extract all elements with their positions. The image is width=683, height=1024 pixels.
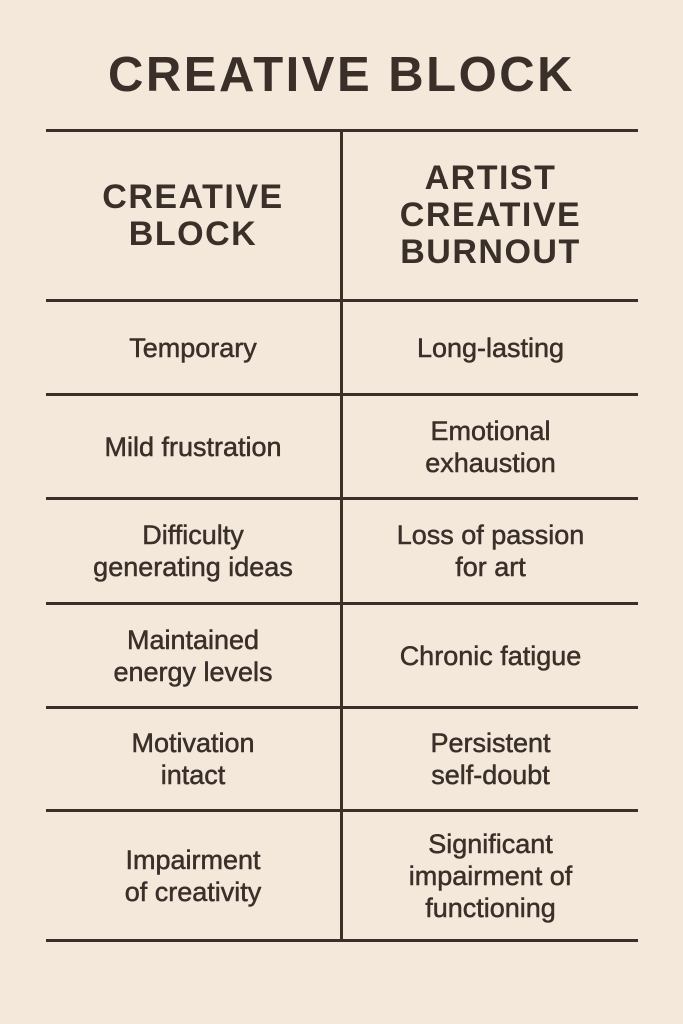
row 5 left: intact [161,760,225,790]
row 3 right: Loss of passion [397,520,584,550]
header: artist creative burnout: CREATIVE [400,196,581,234]
row 5 right [430,728,551,790]
row 6 right: functioning [425,892,556,922]
row 5 right: Persistent [430,728,551,758]
header: artist creative burnout: BURNOUT [400,233,581,271]
row 2 right: Emotional [430,416,551,446]
row 4 left [113,624,273,687]
row 3 left: generating ideas [93,552,293,582]
row 6 left: of creativity [125,876,261,906]
row 6 right [409,828,573,923]
row 5 right: self-doubt [431,760,550,790]
row 2 left: Mild frustration [104,432,282,462]
row 2 right: exhaustion [425,448,556,478]
row 5 left [131,728,255,790]
row 6 right: impairment of [409,860,572,890]
title: CREATIVE BLOCK [108,48,575,102]
row 3 right: for art [455,552,526,582]
row 1 right: Long-lasting [417,332,564,362]
row 4 right: Chronic fatigue [400,640,581,670]
row 6 left [125,844,262,907]
header: artist creative burnout: ARTIST [425,159,556,197]
row 2 right [425,416,556,478]
header: creative block: BLOCK [129,214,257,252]
row 6 left: Impairment [125,844,261,874]
row 3 left: Difficulty [142,520,244,550]
row 4 left: Maintained [127,624,259,654]
row 3 left [93,520,293,582]
row 3 right [397,520,584,582]
header: creative block: CREATIVE [102,178,284,216]
header: creative block [102,178,284,252]
row 6 right: Significant [428,828,553,858]
row 4 left: energy levels [113,656,273,686]
row 1 left: Temporary [129,332,257,362]
header: artist creative burnout [400,159,581,271]
row 5 left: Motivation [131,728,255,758]
